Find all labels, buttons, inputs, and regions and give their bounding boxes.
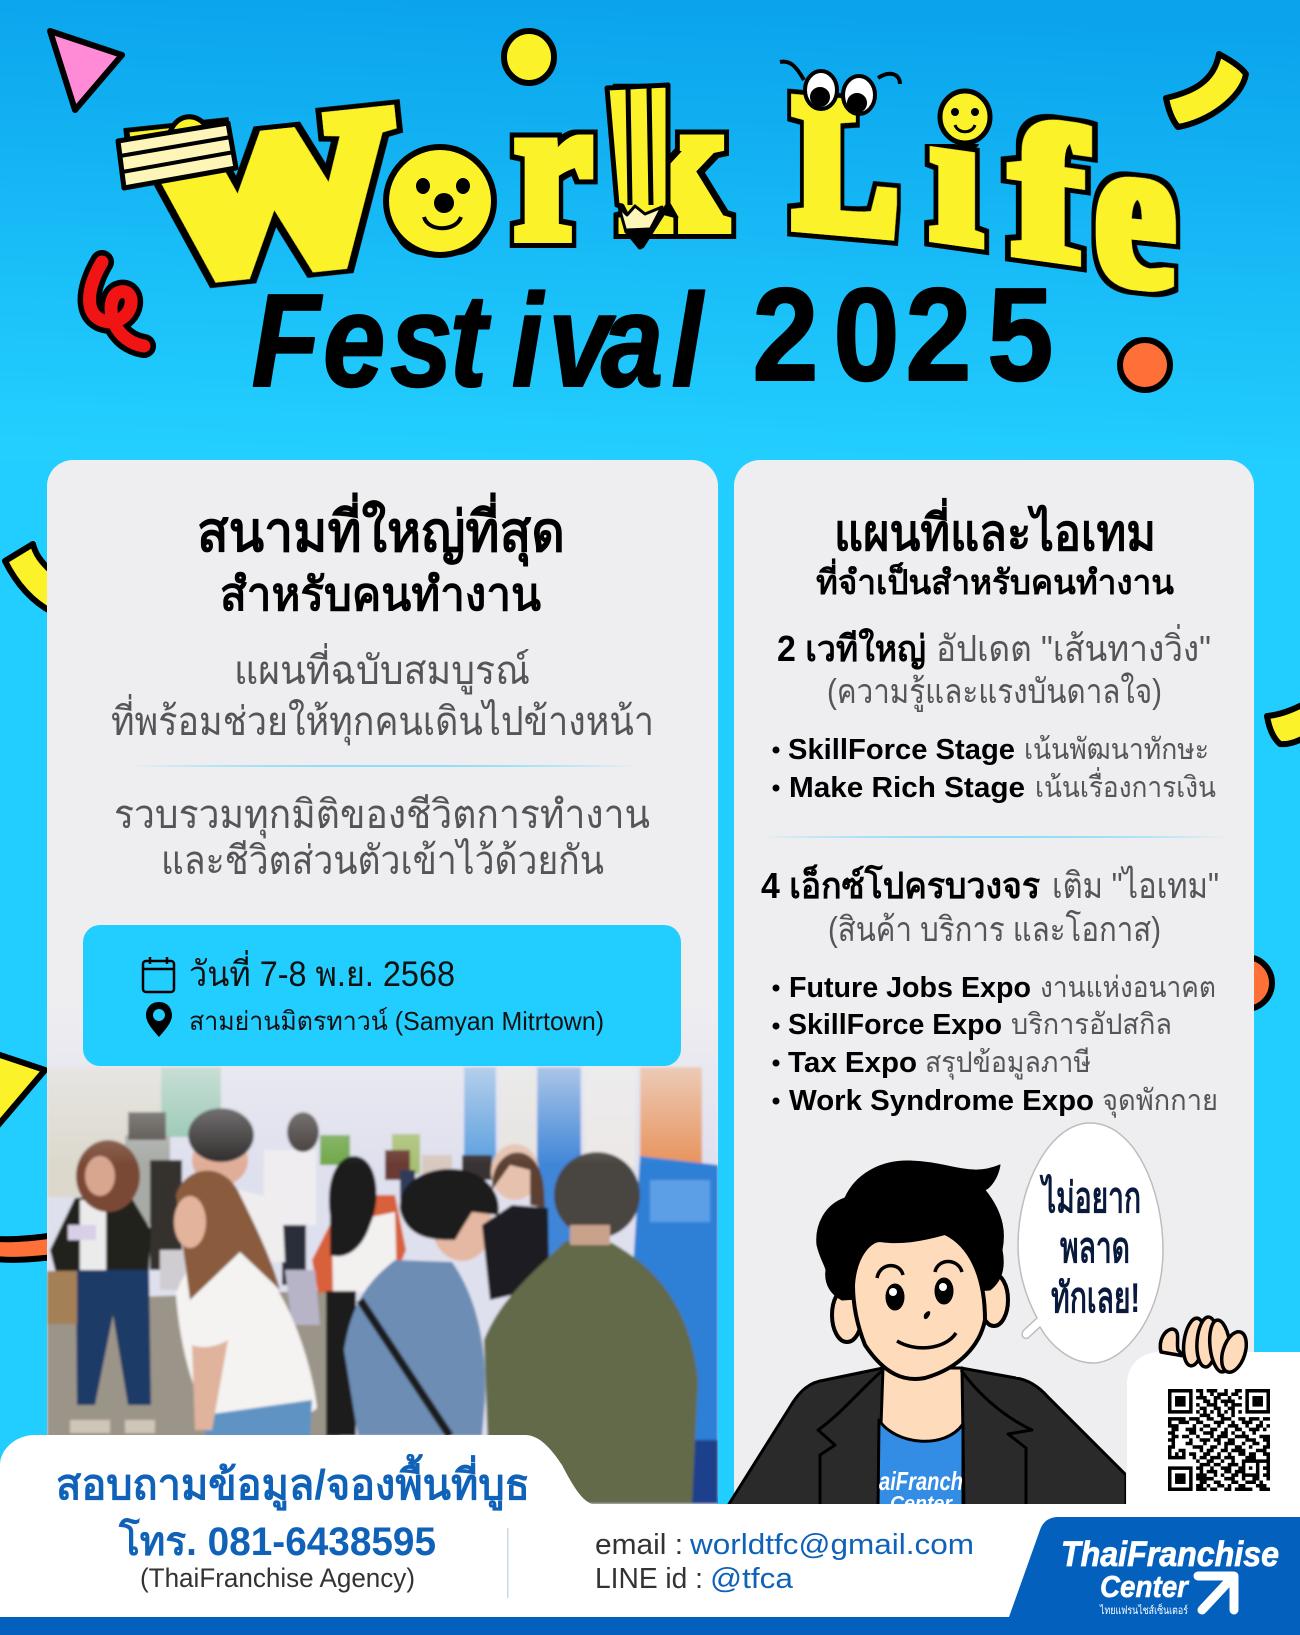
text block: four expos: (สินค้า บริการ และโอกาส): [828, 910, 1161, 949]
venue: สามย่านมิตรทาวน์ (Samyan Mitrtown): [189, 1006, 604, 1036]
logo: ThaiFranchise Center: ไทยแฟรนไชส์เซ็นเตอร์: [1099, 1603, 1188, 1617]
title: Work Life: [116, 60, 1180, 298]
email: [595, 1529, 974, 1561]
decoration: title confetti: [50, 31, 1246, 390]
young man: [230, 1190, 285, 1262]
text block: four expos: [761, 863, 1219, 949]
mascot: Center: [890, 1493, 953, 1515]
footer: contact band: [0, 1435, 1300, 1635]
contact heading: สอบถามข้อมูล/จองพื้นที่บูธ: [56, 1453, 530, 1511]
text block: four expos: 4 เอ็กซ์โปครบวงจร: [761, 863, 1041, 906]
list: expos: [772, 972, 1218, 1118]
title: Work Life: e: [1094, 89, 1176, 335]
speech bubble: ไม่อยาก: [1039, 1173, 1141, 1221]
line id: @tfca: [710, 1563, 794, 1595]
title: Work Life: r: [514, 53, 592, 283]
text block: work and life: และชีวิตส่วนตัวเข้าไว้ด้วยกัน: [161, 838, 604, 883]
icon: fist: [1160, 1316, 1251, 1375]
jacket: [729, 1368, 1126, 1510]
title: Work Life: k: [618, 56, 727, 272]
heading: venue: [197, 492, 565, 620]
list: stages: เน้นเรื่องการเงิน: [1035, 767, 1216, 804]
list: expos: Work Syndrome Expo: [789, 1085, 1094, 1117]
woman left: [48, 1196, 152, 1274]
speech bubble: ทักเลย!: [1051, 1274, 1140, 1321]
background: [0, 0, 1300, 460]
woman black hair: [312, 1195, 406, 1293]
logo: ThaiFranchise Center: [1009, 1517, 1300, 1635]
logo: ThaiFranchise Center: Center: [1100, 1569, 1190, 1604]
list: stages: [772, 734, 1216, 804]
title: Festival 2025: [252, 260, 1053, 414]
woman in white: [176, 1252, 317, 1425]
panel: map and items: [734, 460, 1254, 1504]
list: expos: จุดพักกาย: [1102, 1085, 1218, 1118]
man in white: [264, 1150, 316, 1225]
text block: two stages: [777, 624, 1211, 712]
mascot: [729, 1161, 1126, 1515]
panel: venue: [47, 460, 718, 1520]
list: expos: งานแห่งอนาคต: [1040, 972, 1216, 1004]
list: expos: SkillForce Expo: [788, 1009, 1002, 1041]
list: stages: เน้นพัฒนาทักษะ: [1024, 734, 1209, 766]
mascot: aiFranch: [879, 1466, 963, 1496]
icon: location pin: [146, 1002, 172, 1037]
list: stages: Make Rich Stage: [789, 772, 1025, 804]
woman back: [482, 1205, 549, 1300]
icon: striped tape: [118, 117, 236, 188]
line id: [595, 1563, 794, 1595]
photo: event crowd: [47, 1066, 718, 1504]
title: Work Life: o: [395, 84, 485, 283]
list: expos: บริการอัปสกิล: [1011, 1009, 1172, 1041]
title: Work Life: i: [930, 71, 982, 285]
logo: ThaiFranchise Center: ThaiFranchise: [1061, 1535, 1279, 1574]
text block: two stages: อัปเดต "เส้นทางวิ่ง": [936, 624, 1211, 669]
text block: complete map: [111, 643, 654, 746]
date: วันที่ 7-8 พ.ย. 2568: [189, 950, 455, 994]
icon: googly eyes: [780, 62, 900, 114]
speech bubble: พลาด: [1060, 1224, 1130, 1271]
speech bubble: [1018, 1123, 1163, 1363]
man stripes: [344, 1260, 485, 1436]
callout: date and venue: [83, 925, 681, 1066]
list: expos: Tax Expo: [788, 1047, 917, 1079]
icon: arrow: [1198, 1576, 1234, 1610]
email: email :: [595, 1529, 683, 1561]
list: expos: สรุปข้อมูลภาษี: [925, 1047, 1091, 1080]
heading: venue: สำหรับคนทำงาน: [220, 568, 542, 620]
decoration: edge shapes: [0, 544, 1300, 1260]
text block: complete map: แผนที่ฉบับสมบูรณ์: [234, 643, 530, 694]
text block: work and life: [114, 793, 650, 883]
icon: smiley on letter o: [386, 147, 494, 255]
icon: calendar: [143, 957, 174, 992]
icon: pencil: [607, 85, 668, 247]
olive man: [484, 1241, 698, 1504]
email: worldtfc@gmail.com: [689, 1529, 974, 1561]
heading: venue: สนามที่ใหญ่ที่สุด: [197, 492, 565, 567]
text block: two stages: (ความรู้และแรงบันดาลใจ): [827, 672, 1162, 712]
face: [853, 1233, 985, 1379]
text block: complete map: ที่พร้อมช่วยให้ทุกคนเดินไปข้างหน้า: [111, 694, 654, 746]
title: Festival 2025: Festival: [252, 266, 705, 414]
text block: four expos: เติม "ไอเทม": [1052, 865, 1219, 906]
text block: two stages: 2 เวทีใหญ่: [777, 627, 926, 670]
line id: LINE id :: [595, 1563, 703, 1595]
icon: smiley dot: [940, 91, 990, 143]
title: Work Life: f: [1011, 83, 1086, 304]
back crowd: [125, 1135, 170, 1225]
phone: โทร. 081-6438595: [118, 1518, 436, 1564]
list: stages: SkillForce Stage: [788, 734, 1015, 766]
heading: map and items: [816, 498, 1174, 602]
panel: QR code: [1127, 1316, 1300, 1504]
banner BeDee: [632, 1154, 718, 1442]
list: expos: Future Jobs Expo: [789, 972, 1031, 1004]
text block: work and life: รวบรวมทุกมิติของชีวิตการทำงาน: [114, 793, 650, 839]
hair: [817, 1161, 1003, 1300]
QR code: [1168, 1391, 1270, 1489]
ears: [830, 1296, 860, 1344]
heading: map and items: แผนที่และไอเทม: [834, 498, 1156, 561]
title: Festival 2025: 2025: [752, 260, 1053, 408]
title: Work Life: W: [131, 63, 409, 324]
eyes: [877, 1262, 962, 1348]
title: Work Life: L: [795, 58, 897, 273]
agency: (ThaiFranchise Agency): [140, 1563, 415, 1593]
heading: map and items: ที่จำเป็นสำหรับคนทำงาน: [816, 558, 1174, 602]
